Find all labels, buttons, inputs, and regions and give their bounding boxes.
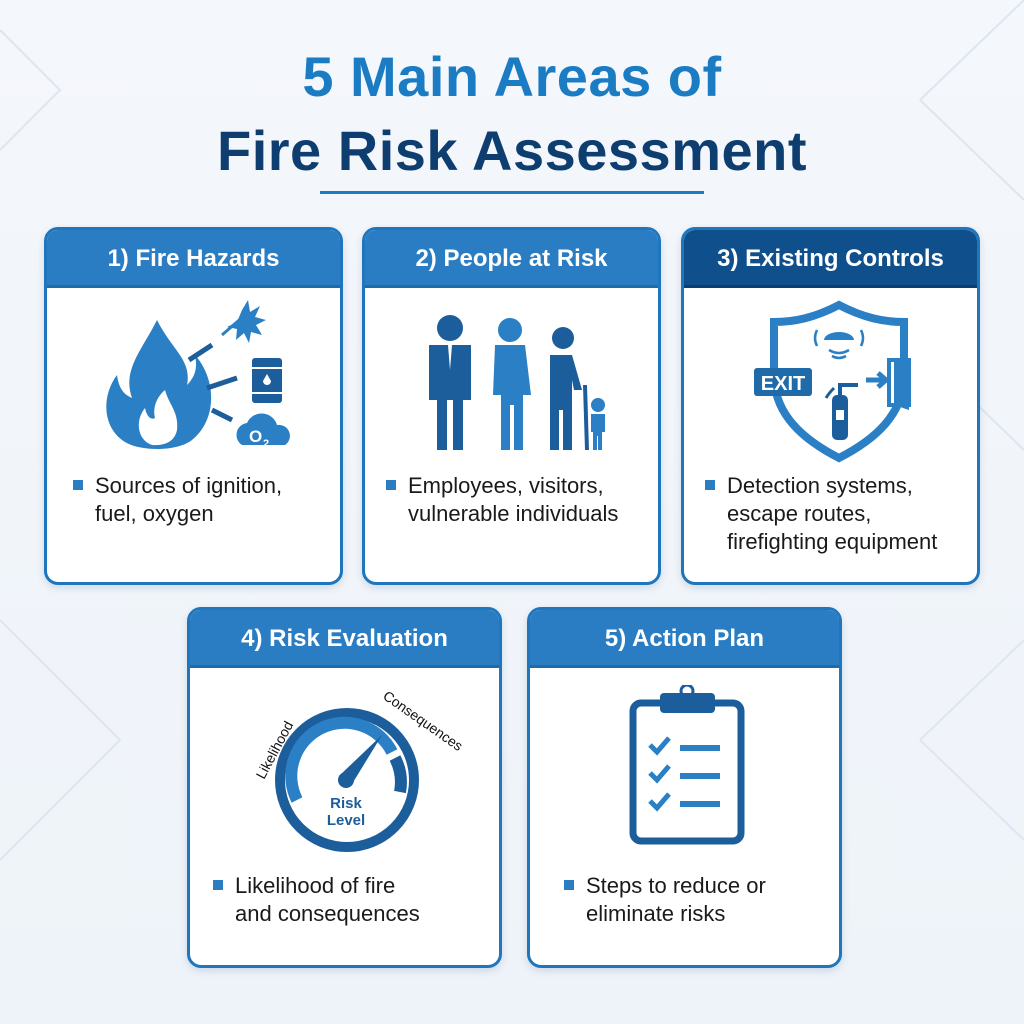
title line 1: 5 Main Areas of: [302, 45, 722, 108]
text: action: Steps to reduce or: [586, 873, 766, 898]
icon: clipboard: [630, 685, 744, 844]
heading: [190, 610, 499, 668]
heading: 1) Fire Hazards: [107, 245, 280, 272]
text: action: eliminate risks: [586, 901, 725, 926]
panel: action plan: [527, 607, 842, 968]
text: controls: firefighting equipment: [727, 529, 937, 554]
heading: 4) Risk Evaluation: [241, 625, 448, 652]
text: evaluation: Likelihood of fire: [235, 873, 395, 898]
heading: 3) Existing Controls: [717, 245, 944, 272]
text: action: [564, 873, 766, 926]
title underline: [320, 191, 704, 194]
icon: shield: [754, 300, 911, 462]
text: hazards: fuel, oxygen: [95, 501, 214, 526]
icon: gauge: Level: [327, 812, 365, 829]
text: evaluation: and consequences: [235, 901, 420, 926]
icon: fire triangle: [106, 300, 290, 450]
text: people: vulnerable individuals: [408, 501, 618, 526]
text: hazards: [73, 473, 282, 526]
icon: gauge: Risk: [330, 795, 362, 812]
text: people: [386, 473, 618, 526]
title line 2: Fire Risk Assessment: [217, 119, 807, 182]
icon: fire triangle: 2: [263, 438, 269, 450]
text: hazards: Sources of ignition,: [95, 473, 282, 498]
text: evaluation: [213, 873, 420, 926]
heading: [47, 230, 340, 288]
panel: risk evaluation: [187, 607, 502, 968]
panel: existing controls: [681, 227, 980, 585]
text: controls: Detection systems,: [727, 473, 913, 498]
panel: people at risk: [362, 227, 661, 585]
heading: [684, 230, 977, 288]
text: controls: escape routes,: [727, 501, 871, 526]
icon: shield: EXIT: [761, 373, 805, 395]
heading: [530, 610, 839, 668]
heading: 5) Action Plan: [605, 625, 764, 652]
icon: fire triangle: O: [249, 427, 262, 446]
heading: 2) People at Risk: [415, 245, 608, 272]
text: people: Employees, visitors,: [408, 473, 604, 498]
icon: people: [429, 315, 605, 450]
icon: gauge: [253, 687, 466, 852]
icon: gauge: Consequences: [380, 687, 466, 754]
heading: [365, 230, 658, 288]
panel: fire hazards: [44, 227, 343, 585]
text: controls: [705, 473, 938, 554]
icon: gauge: Likelihood: [253, 718, 296, 781]
